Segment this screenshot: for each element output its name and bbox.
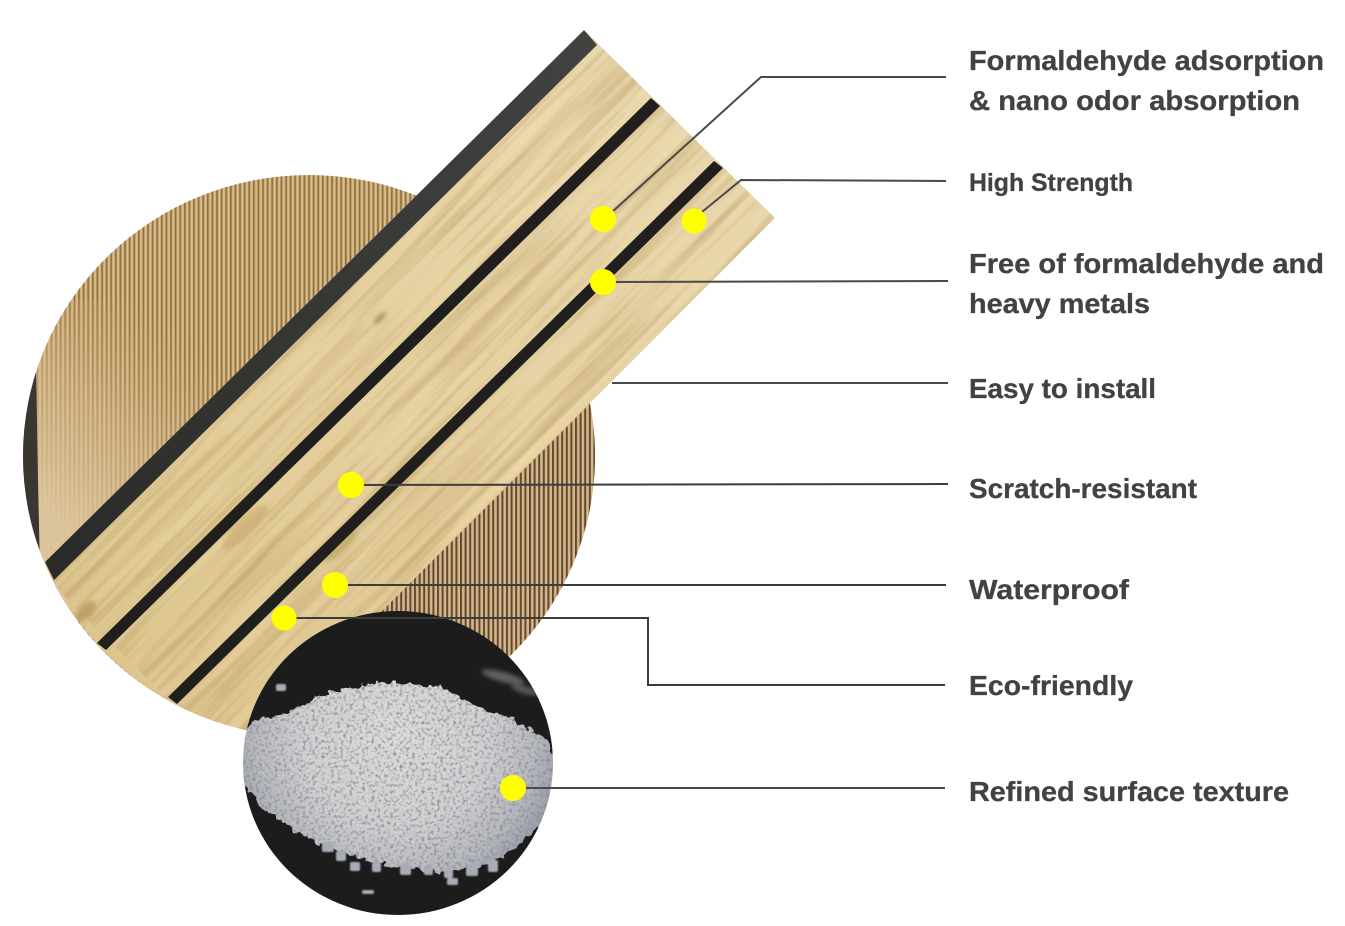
label: high strength: High Strength [969, 169, 1133, 197]
label: eco-friendly: Eco-friendly [969, 670, 1133, 701]
leader line: free of formaldehyde [603, 281, 948, 282]
leader line: eco-friendly [284, 618, 945, 685]
panel: wood slat plank [39, 15, 783, 759]
label: free of formaldehyde: Free of formaldehyde and [969, 248, 1324, 279]
label: formaldehyde adsorption: & nano odor absorption [969, 85, 1300, 116]
black edge strip [45, 30, 597, 580]
label: formaldehyde adsorption [969, 45, 1324, 116]
scattered granules [276, 684, 498, 894]
groove 3 [168, 161, 723, 704]
leader line: waterproof [335, 584, 946, 586]
leader line: scratch-resistant [351, 484, 948, 485]
dark ribs lower right [382, 404, 595, 657]
leader line: refined surface texture [513, 787, 945, 789]
gray smudge upper right [480, 666, 540, 697]
wood knots [71, 310, 388, 626]
label: easy to install: Easy to install [969, 373, 1156, 404]
label: refined surface texture: Refined surface texture [969, 776, 1289, 807]
wood grain texture [39, 15, 783, 759]
dark edge at left of wall photo [23, 371, 40, 551]
label: scratch-resistant: Scratch-resistant [969, 473, 1197, 504]
granule pile [238, 682, 558, 872]
leader line: formaldehyde adsorption [612, 77, 946, 212]
panel: resin granules circle [238, 608, 558, 918]
label: waterproof: Waterproof [969, 574, 1130, 605]
leader line: easy to install [612, 382, 948, 384]
label: free of formaldehyde: heavy metals [969, 288, 1150, 319]
marker dots [272, 206, 706, 801]
label: free of formaldehyde [969, 248, 1324, 319]
leader line: high strength [702, 180, 946, 212]
label: formaldehyde adsorption: Formaldehyde adsorption [969, 45, 1324, 76]
groove 2 [97, 98, 660, 650]
panel: ribbed wall circle [18, 172, 600, 740]
